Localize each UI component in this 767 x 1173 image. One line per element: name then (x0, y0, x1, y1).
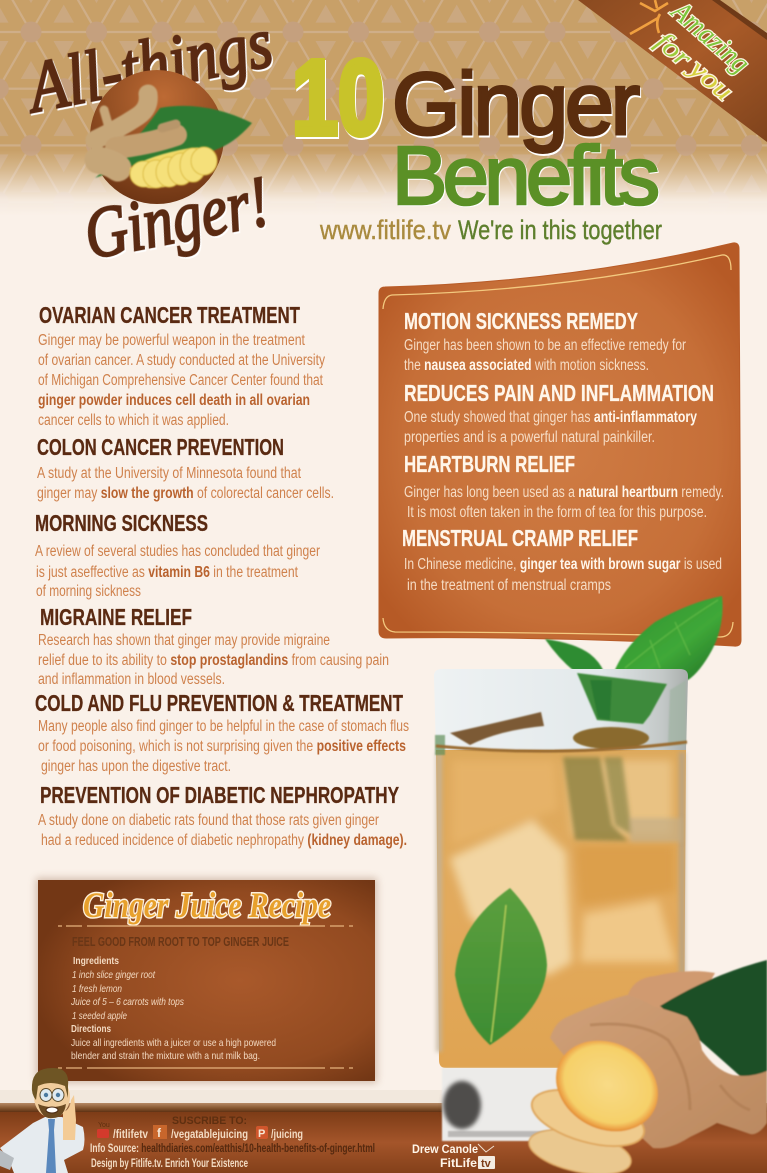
text: diabetic nephropathy: had a reduced incidence of diabetic nephropathy (kidney damage). (41, 832, 407, 849)
face and hair (32, 1068, 70, 1118)
handle: fitlifetv: /fitlifetv (113, 1127, 148, 1141)
logo: Drew Canole FitLife.tv: Drew Canole (412, 1142, 478, 1156)
ribbon text: you: you (681, 51, 739, 106)
text: ovarian cancer: of ovarian cancer. A study conducted at the University (38, 352, 325, 369)
glass edge shading (436, 752, 685, 1052)
shirt (0, 1117, 84, 1173)
heading: morning sickness: MORNING SICKNESS (35, 510, 208, 536)
text: colon cancer (37, 465, 334, 502)
illustration: glass of ginger tea (434, 596, 723, 1141)
icon: youtube: You (98, 1122, 110, 1129)
icon: youtube (97, 1122, 110, 1138)
ginger root body (550, 995, 767, 1148)
mint stem inside glass (435, 673, 686, 755)
text: menstrual cramp relief: In Chinese medicine, ginger tea with brown sugar is used (404, 556, 722, 573)
icon: ginger leaf (95, 106, 252, 178)
footer band (0, 1090, 767, 1173)
dark green leaf (660, 960, 767, 1078)
icon: facebook (153, 1125, 167, 1140)
ingredients list: 1 fresh lemon (72, 983, 122, 995)
ginger slices (525, 1023, 674, 1173)
heading: cold and flu: COLD AND FLU PREVENTION & TREATMENT (35, 690, 403, 716)
heading: menstrual cramp relief: MENSTRUAL CRAMP RELIEF (402, 525, 638, 551)
text: heartburn relief (404, 484, 724, 521)
tie (46, 1119, 56, 1173)
logo: Drew Canole FitLife.tv (412, 1142, 495, 1170)
text: cold and flu: Many people also find ginger to be helpful in the case of stomach flus (38, 718, 409, 735)
text: ovarian cancer: ginger powder induces cell death in all ovarian (38, 392, 310, 409)
ingredients list: Ingredients (73, 955, 119, 967)
text: pain and inflammation: properties and is a powerful natural painkiller. (404, 429, 655, 446)
text: migraine relief: Research has shown that ginger may provide migraine (38, 632, 330, 649)
emblem: brown circle (90, 70, 224, 204)
script heading: Ginger!: Ginger! (78, 161, 276, 275)
design credit: Design by Fitlife.tv. Enrich Your Existence (91, 1156, 248, 1170)
icon: orange sunburst logo (630, 0, 668, 34)
glass foot (442, 1068, 562, 1141)
icon: pinterest: P (258, 1128, 265, 1140)
text: motion sickness (404, 337, 686, 374)
text: colon cancer: A study at the University of Minnesota found that (37, 465, 302, 482)
text: cold and flu: ginger has upon the digestive tract. (41, 758, 231, 775)
text: menstrual cramp relief (404, 556, 722, 594)
heading: heartburn relief: HEARTBURN RELIEF (404, 451, 575, 477)
logo: Drew Canole FitLife.tv: tv (481, 1158, 492, 1170)
footer text: subscribe and credits (90, 1115, 375, 1170)
subscribe heading: SUSCRIBE TO: (172, 1115, 247, 1127)
ice cubes (450, 760, 676, 976)
heading: migraine relief: MIGRAINE RELIEF (40, 604, 192, 630)
text: morning sickness: A review of several studies has concluded that ginger (35, 543, 320, 560)
ingredients list: Juice of 5 – 6 carrots with tops (70, 996, 185, 1008)
text: migraine relief (38, 632, 389, 688)
illustration: cartoon man (0, 1068, 84, 1173)
ribbon text: for: for (650, 26, 698, 73)
left column: benefits (35, 302, 409, 849)
text: ovarian cancer: Ginger may be powerful weapon in the treatment (38, 332, 306, 349)
ingredients list: 1 inch slice ginger root (72, 969, 156, 981)
ice at liquid surface (436, 712, 687, 751)
text: motion sickness: the nausea associated with motion sickness. (404, 357, 649, 374)
icon: ginger root (95, 94, 176, 168)
ginger upper lobe (627, 971, 715, 1012)
number 10: 10 (292, 39, 384, 157)
recipe subheading: FEEL GOOD FROM ROOT TO TOP GINGER JUICE (72, 935, 289, 949)
ingredients list (70, 955, 185, 1022)
text: ovarian cancer: of Michigan Comprehensive Cancer Center found that (38, 372, 324, 389)
text: migraine relief: and inflammation in blood vessels. (38, 671, 225, 688)
tagline: We're in this together (458, 215, 662, 245)
main title: 10 Ginger Benefits (292, 39, 660, 222)
panel: ginger juice recipe (36, 878, 377, 1083)
logo: Drew Canole FitLife.tv: FitLife (440, 1156, 477, 1170)
directions (71, 1023, 276, 1062)
mint leaves above the glass (545, 596, 723, 680)
text: diabetic nephropathy (38, 812, 407, 849)
text: morning sickness (35, 543, 320, 600)
text: migraine relief: relief due to its ability to stop prostaglandins from causing pain (38, 652, 389, 669)
text: cold and flu (38, 718, 409, 775)
heading: ovarian cancer: OVARIAN CANCER TREATMENT (39, 302, 300, 328)
info source: Info Source: healthdiaries.com/eatthis/10-health-benefits-of-ginger.html (90, 1141, 375, 1155)
text: cold and flu: or food poisoning, which is not surprising given the positive effects (38, 738, 406, 755)
text: heartburn relief: Ginger has long been used as a natural heartburn remedy. (404, 484, 724, 501)
icon: facebook: f (157, 1126, 162, 1140)
heading: diabetic nephropathy: PREVENTION OF DIABETIC NEPHROPATHY (40, 782, 399, 808)
glass rim (434, 669, 688, 752)
illustration: ginger root and leaf (525, 960, 767, 1173)
icon: mint leaf in glass (455, 888, 547, 1045)
header triangle pattern band (0, 0, 767, 216)
handle: juicing: /juicing (271, 1127, 303, 1141)
icon: lemon-yellow ginger slices (130, 147, 217, 188)
text: ovarian cancer: cancer cells to which it was applied. (38, 412, 229, 429)
directions: blender and strain the mixture with a nut milk bag. (71, 1050, 260, 1062)
directions: Directions (71, 1023, 111, 1035)
text: ovarian cancer (38, 332, 325, 429)
tagline (319, 215, 662, 245)
word Benefits: Benefits (392, 129, 660, 222)
liquid (436, 750, 686, 1068)
corner ribbon (578, 0, 767, 142)
panel shape (379, 243, 741, 646)
text: morning sickness: of morning sickness (36, 583, 141, 600)
recipe title: Ginger Juice Recipe (83, 885, 331, 925)
text: pain and inflammation (404, 409, 697, 446)
panel: right orange benefits (379, 243, 741, 646)
text: motion sickness: Ginger has been shown to be an effective remedy for (404, 337, 686, 354)
directions: Juice all ingredients with a juicer or use a high powered (71, 1037, 276, 1049)
icon: pinterest (256, 1126, 268, 1140)
heading: motion sickness: MOTION SICKNESS REMEDY (404, 308, 638, 334)
title: All-things Ginger script with emblem (18, 2, 279, 275)
text: colon cancer: ginger may slow the growth of colorectal cancer cells. (37, 485, 334, 502)
text: morning sickness: is just aseffective as vitamin B6 in the treatment (36, 564, 299, 581)
sleeve and belt detail (0, 1150, 14, 1170)
handle: vegatablejuicing: /vegatablejuicing (171, 1127, 248, 1141)
tagline: www.fitlife.tv (319, 215, 451, 245)
text: diabetic nephropathy: A study done on diabetic rats found that those rats given ginger (38, 812, 379, 829)
text: pain and inflammation: One study showed that ginger has anti-inflammatory (404, 409, 697, 426)
raised hand (63, 1095, 76, 1140)
text: menstrual cramp relief: in the treatment of menstrual cramps (407, 577, 611, 594)
word Ginger: Ginger (392, 54, 640, 153)
ingredients list: 1 seeded apple (72, 1010, 127, 1022)
heading: colon cancer: COLON CANCER PREVENTION (37, 434, 284, 460)
